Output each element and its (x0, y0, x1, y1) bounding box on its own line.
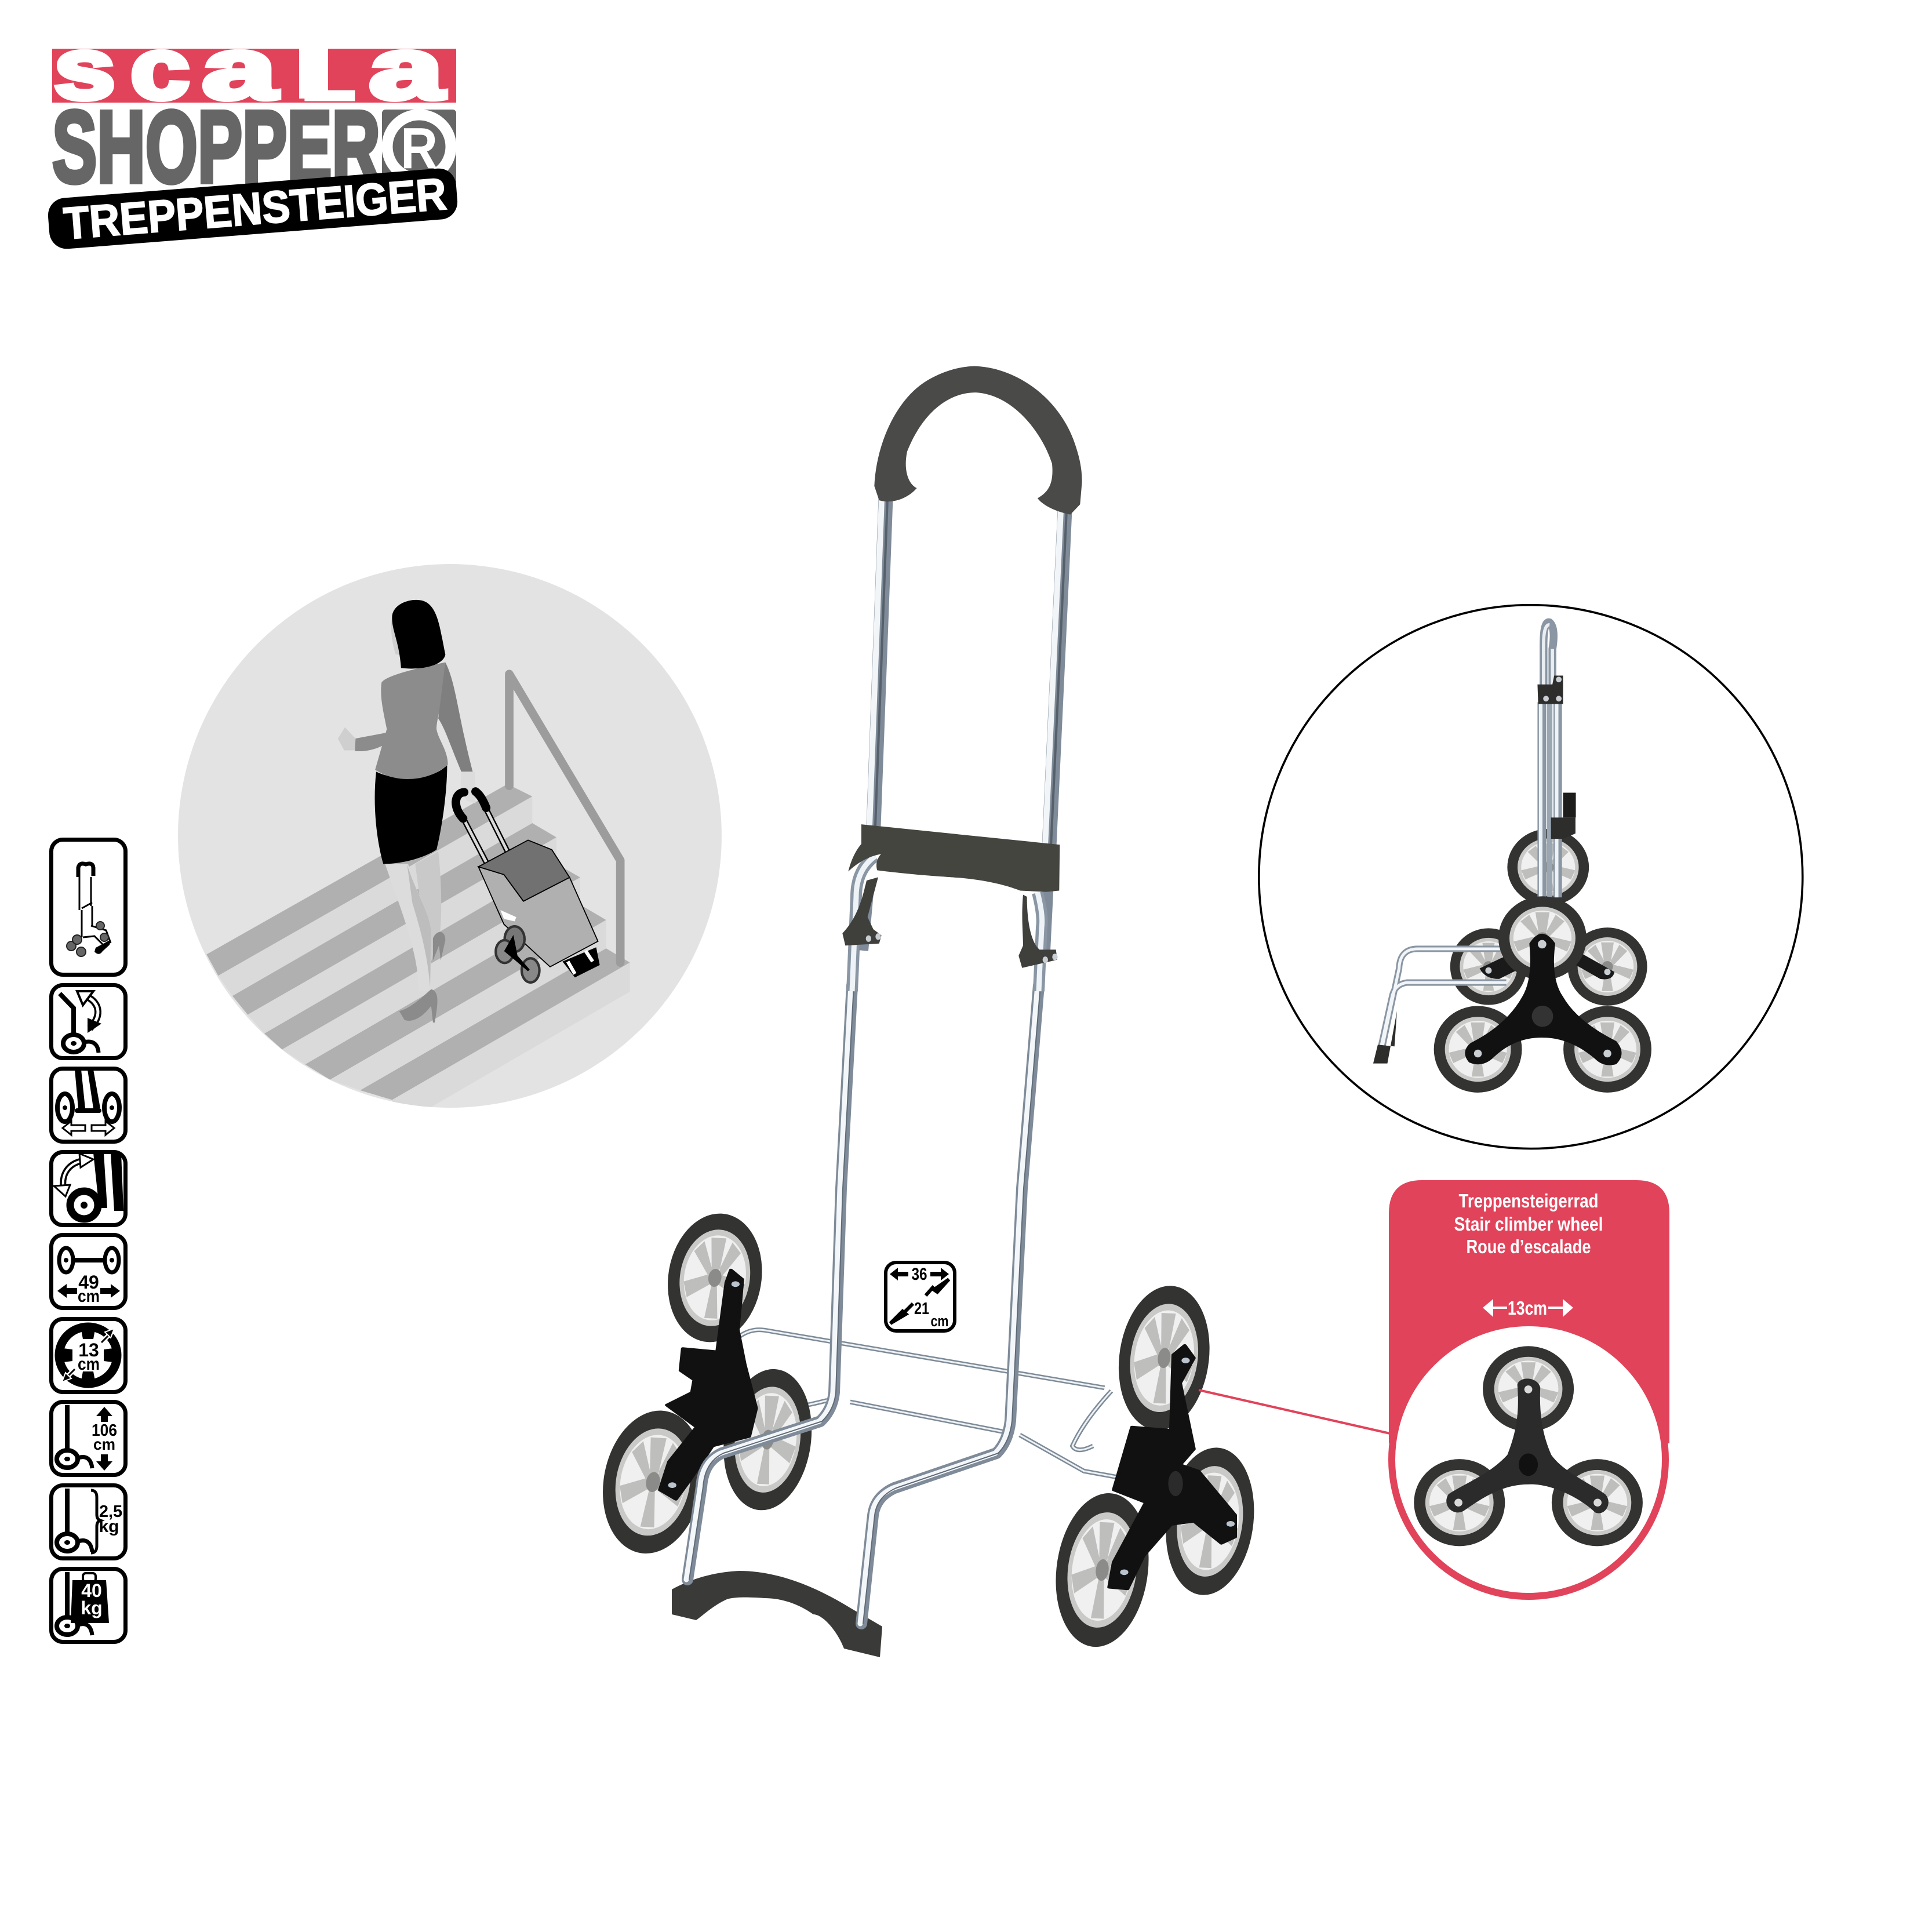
stairs (206, 784, 630, 1130)
circular wheel detail (1392, 1323, 1665, 1596)
handrail (510, 674, 620, 963)
red panel background (1389, 1180, 1669, 1443)
icon: wheel base 49 cm: cm (78, 1287, 100, 1306)
logo: scala wordmark: a (369, 20, 445, 117)
logo: shopper wordmark: R (401, 116, 438, 181)
logo: scala wordmark: a (202, 20, 278, 117)
panel title, three languages (1454, 1190, 1603, 1257)
icon: weight 2,5 kg (51, 1485, 125, 1558)
bottom wheels (1434, 1006, 1522, 1093)
wheel star bracket (1465, 934, 1622, 1065)
side view frame tubes (1537, 622, 1576, 897)
icon: height 106 cm: 106 (92, 1421, 117, 1440)
front upper wheel (1498, 896, 1587, 980)
icon: tilt trolley (51, 985, 125, 1058)
left clamp with bolts (842, 877, 882, 945)
detail: three wheel star (1414, 1346, 1643, 1546)
main product: stair climber trolley frame (595, 366, 1261, 1657)
logo: scala wordmark: s (54, 20, 115, 117)
illustration: woman pulling trolley up the stairs (178, 564, 722, 1130)
middle arms (1480, 947, 1614, 979)
right clamp with bolts (1018, 895, 1058, 968)
icon: height 106 cm: cm (93, 1435, 115, 1453)
top handle grip (874, 366, 1082, 515)
icon: bag dimensions 36 x 21 cm (886, 1262, 955, 1331)
icon: bag dimensions 36 x 21 cm: cm (931, 1312, 948, 1330)
brand logo (47, 20, 459, 250)
icon: weight 2,5 kg: 2,5 (99, 1502, 122, 1521)
icon column: product features (51, 839, 125, 1642)
logo: shopper wordmark: SHOPPER (52, 90, 380, 204)
side view base rails (1373, 949, 1507, 1064)
logo: scala wordmark (52, 20, 456, 117)
upper telescopic right tube (1038, 510, 1067, 991)
right wheel cluster (1049, 1284, 1261, 1649)
icon: wheel diameter 13 cm: 13 (78, 1340, 99, 1360)
icon: width adjustment (51, 1069, 125, 1142)
icon: wheel diameter 13 cm (51, 1319, 125, 1392)
callout panel: stair climber wheel (1389, 1180, 1669, 1596)
icon: height 106 cm (51, 1402, 125, 1475)
logo: scala wordmark: L (300, 35, 356, 115)
icon: trolley overview (51, 839, 125, 975)
upper telescopic left tube (852, 499, 887, 991)
miniature trolley (456, 791, 600, 983)
bottom foot plate (672, 1571, 882, 1657)
logo: scala wordmark: c (130, 20, 190, 117)
side-view photo circle (1259, 605, 1803, 1149)
logo: treppensteiger band: TREPPENSTEIGER (62, 168, 448, 249)
middle wheels (1450, 928, 1527, 1005)
panel title, three languages: Roue d’escalade (1467, 1236, 1591, 1257)
bracket bolts and knob (1474, 940, 1611, 1057)
icon: bag dimensions 36 x 21 cm: 21 (914, 1300, 929, 1318)
middle handle bar (848, 824, 1060, 892)
thin rear wires (717, 1330, 1118, 1478)
icon: wheel diameter 13 cm: cm (78, 1355, 100, 1374)
lower right tube (860, 985, 1040, 1624)
icon: load capacity 40 kg: 40 (81, 1580, 102, 1601)
lower left tube (686, 985, 854, 1580)
icon: load capacity 40 kg (51, 1569, 125, 1642)
callout line to wheel (1199, 1390, 1390, 1433)
left wheel cluster (595, 1211, 818, 1556)
icon: wheel base 49 cm: 49 (78, 1272, 99, 1293)
wheel size: 13 cm (1483, 1297, 1573, 1319)
panel title, three languages: Stair climber wheel (1454, 1213, 1603, 1235)
icon: load capacity 40 kg: kg (81, 1598, 103, 1618)
icon: wheel base 49 cm (51, 1235, 125, 1308)
icon: weight 2,5 kg: kg (99, 1517, 119, 1536)
panel title, three languages: Treppensteigerrad (1458, 1190, 1599, 1211)
icon: bag dimensions 36 x 21 cm: 36 (911, 1265, 927, 1284)
icon: folding wheel (51, 1152, 125, 1225)
back top wheel (1507, 829, 1589, 905)
woman (338, 600, 475, 1023)
wheel size: 13 cm: 13cm (1508, 1297, 1547, 1319)
